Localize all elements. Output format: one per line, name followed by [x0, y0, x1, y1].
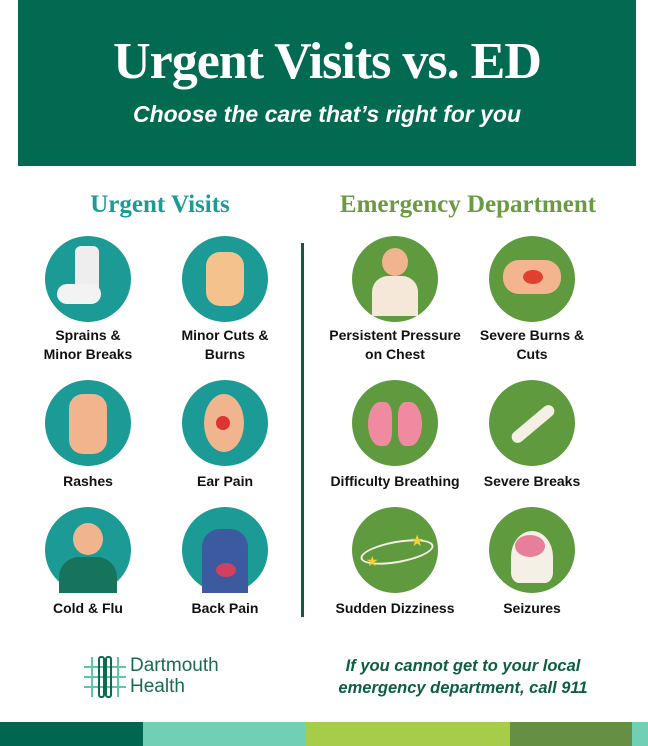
icon: burn	[489, 236, 575, 322]
bottom color bar	[0, 722, 648, 746]
text: brand: Health	[130, 676, 185, 697]
label: Severe Burns &	[480, 327, 584, 343]
heading: emergency department: Emergency Department	[340, 191, 596, 218]
icon: logo mark	[84, 656, 126, 698]
label: Persistent Pressure	[329, 327, 461, 343]
icon: ear	[182, 380, 268, 466]
label: Sudden Dizziness	[335, 600, 455, 616]
icon: bone	[489, 380, 575, 466]
icon: hand cut	[182, 236, 268, 322]
label: Sprains &	[55, 327, 121, 343]
icon: dizziness	[352, 507, 438, 593]
subtitle: Choose the care that’s right for you	[133, 101, 521, 127]
icon: lungs	[352, 380, 438, 466]
label: Difficulty Breathing	[330, 473, 460, 489]
icon: back	[182, 507, 268, 593]
panel: emergency items	[329, 236, 584, 616]
label: Ear Pain	[197, 473, 253, 489]
label: Minor Cuts &	[181, 327, 269, 343]
callout: call 911: If you cannot get to your local	[346, 657, 580, 675]
divider	[301, 243, 304, 617]
label: Seizures	[503, 600, 561, 616]
icon: seizure	[489, 507, 575, 593]
icon: chest	[352, 236, 438, 322]
callout: call 911: emergency department, call 911	[338, 679, 588, 697]
callout: call 911	[338, 657, 588, 697]
logo: Dartmouth Health	[84, 655, 219, 698]
icon: rash	[45, 380, 131, 466]
label: Severe Breaks	[484, 473, 580, 489]
label: Minor Breaks	[44, 346, 132, 362]
label: Cuts	[516, 346, 548, 362]
text: brand: Dartmouth	[130, 655, 219, 676]
icon: cold	[45, 507, 131, 593]
icon: sprain	[45, 236, 131, 322]
label: Back Pain	[192, 600, 258, 616]
label	[181, 327, 269, 362]
text: brand	[130, 655, 219, 697]
label	[480, 327, 584, 362]
heading: urgent visits: Urgent Visits	[90, 191, 230, 218]
label	[329, 327, 461, 362]
label	[44, 327, 132, 362]
header banner	[18, 0, 636, 166]
label: Burns	[205, 346, 245, 362]
panel: urgent items	[44, 236, 269, 616]
icon: dizziness: ★	[410, 533, 424, 550]
label: on Chest	[365, 346, 425, 362]
label: Cold & Flu	[53, 600, 123, 616]
label: Rashes	[63, 473, 113, 489]
title: Urgent Visits vs. ED	[113, 33, 541, 90]
icon: dizziness: ★	[366, 553, 379, 569]
